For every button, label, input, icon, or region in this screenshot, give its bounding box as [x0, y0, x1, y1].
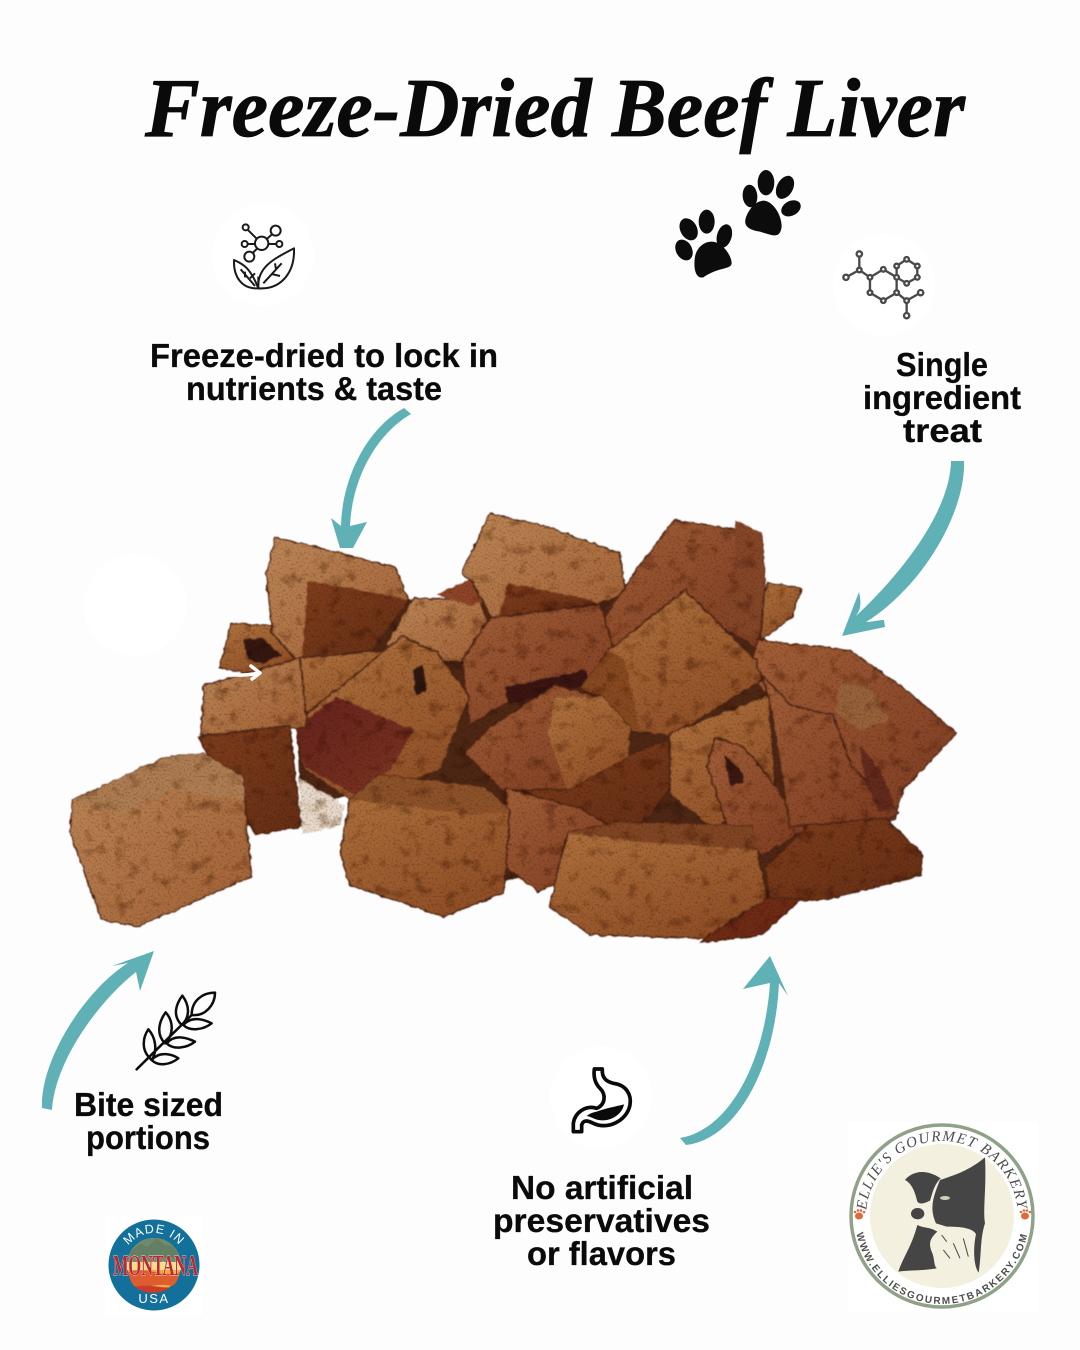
text: freeze-dried callout: Freeze-dried to lock in [150, 337, 498, 374]
text: bite sized callout: Bite sized [74, 1086, 223, 1123]
icon: paw prints [672, 170, 804, 278]
text: freeze-dried callout: nutrients & taste [186, 370, 442, 407]
icon: stomach [550, 1046, 652, 1148]
icon: wheat sprig [137, 993, 215, 1069]
website arc: WWW.ELLIESGOURMETBARKERY.COM [856, 1232, 1027, 1304]
text: no artificial callout [493, 1169, 710, 1272]
arrow: to front-right chunk [680, 956, 788, 1145]
text: no artificial callout: No artificial [511, 1169, 693, 1206]
white circle behind pile [84, 554, 186, 656]
icon: plant with molecules [212, 204, 314, 306]
icon: molecule [833, 234, 935, 336]
text: no artificial callout: or flavors [527, 1235, 676, 1272]
text: single ingredient callout: Single [896, 346, 988, 383]
montana wordmark: MONTANA [113, 1249, 198, 1282]
text: single ingredient callout: treat [903, 412, 982, 449]
text: single ingredient callout [863, 346, 1021, 449]
arrow: to top-left chunk [331, 408, 411, 548]
small white arrow [217, 666, 260, 679]
arrow: to right chunk [842, 461, 964, 636]
logo: Made in Montana [108, 1220, 200, 1310]
text: single ingredient callout: ingredient [863, 379, 1021, 416]
text: no artificial callout: preservatives [493, 1202, 710, 1239]
title: Freeze-Dried Beef Liver [144, 61, 966, 155]
usa text: USA [138, 1291, 170, 1306]
orange paw left [854, 1209, 865, 1220]
logo: Ellie's Gourmet Barkery [849, 1123, 1035, 1309]
text: freeze-dried callout [150, 337, 498, 407]
text: bite sized callout [74, 1086, 223, 1156]
brand name arc: ELLIE'S GOURMET BARKERY [856, 1131, 1028, 1210]
arrow: to front-left cube [42, 951, 154, 1110]
text: bite sized callout: portions [86, 1119, 210, 1156]
made in arc text: MADE IN [123, 1224, 184, 1245]
liver treats photo [70, 513, 957, 943]
dog illustration [898, 1157, 985, 1273]
orange paw right [1020, 1209, 1031, 1220]
